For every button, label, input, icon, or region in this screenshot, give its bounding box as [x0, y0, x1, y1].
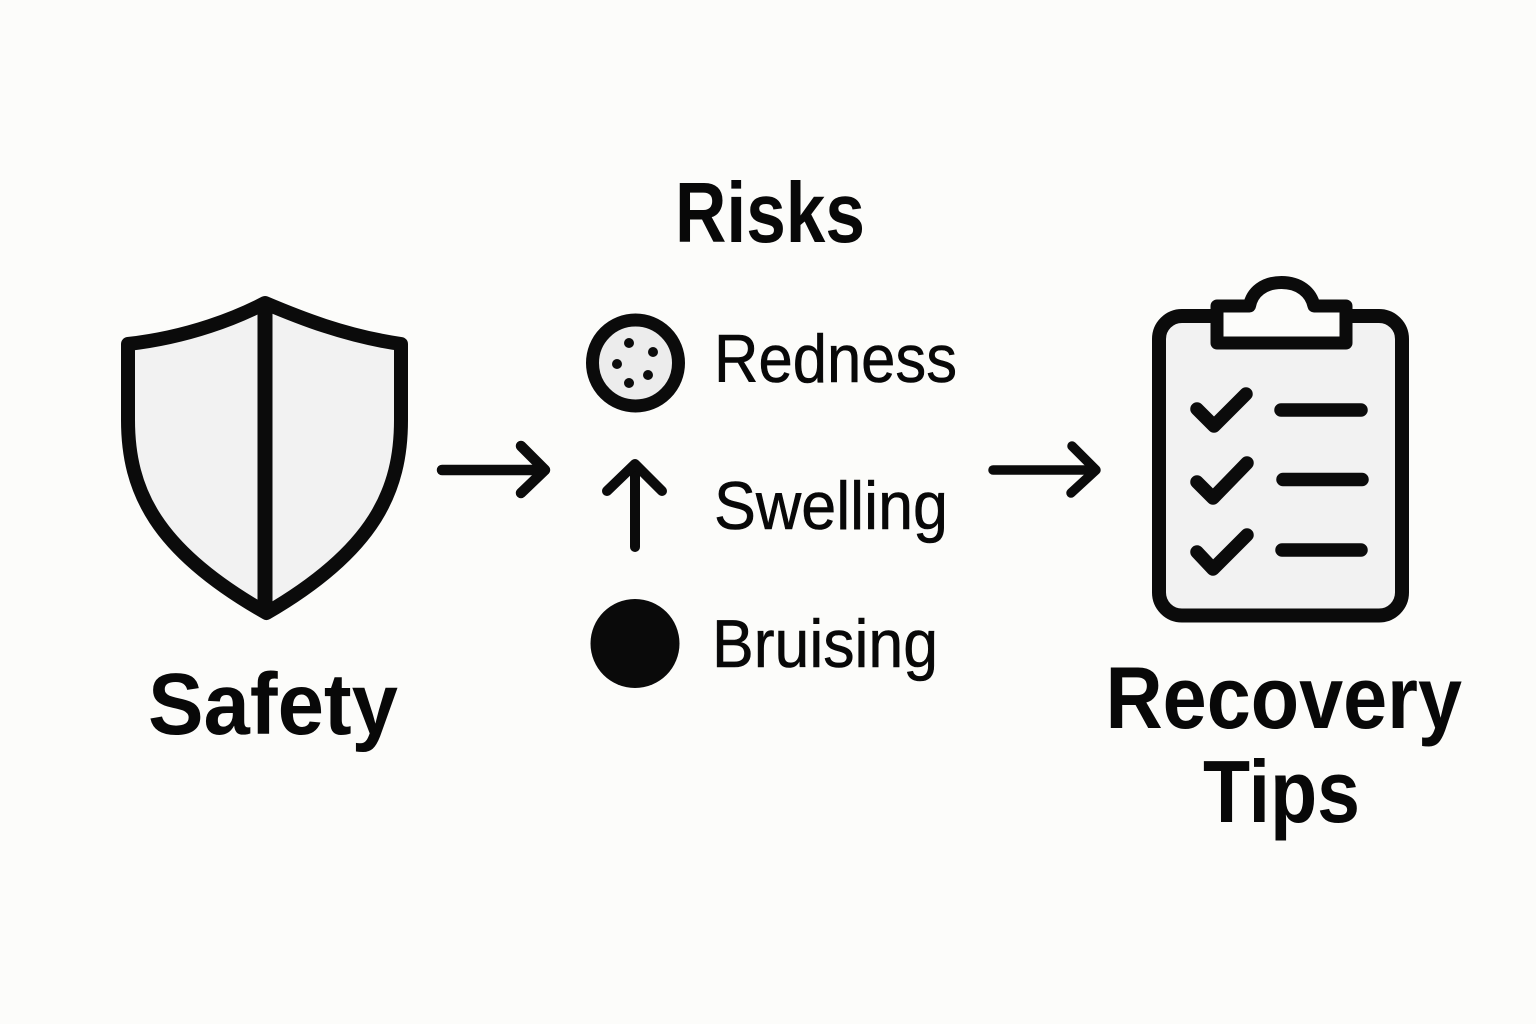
arrow: up [607, 464, 662, 547]
arrow: risks to recovery [993, 446, 1096, 493]
label: Swelling: Swelling [714, 468, 948, 544]
heading: Recovery Tips [1106, 648, 1462, 841]
heading: Recovery Tips: Recovery [1106, 648, 1462, 747]
label: Bruising: Bruising [712, 606, 938, 682]
heading: Risks: Risks [675, 166, 865, 261]
heading: Safety: Safety [148, 656, 398, 753]
icon: redness circle [592, 320, 678, 406]
arrow: safety to risks [442, 446, 545, 493]
label: Redness: Redness [714, 321, 957, 397]
heading: Recovery Tips: Tips [1203, 742, 1360, 841]
icon: shield [128, 303, 401, 613]
icon: clipboard checklist [1159, 282, 1402, 616]
icon: bruising circle [590, 599, 680, 688]
